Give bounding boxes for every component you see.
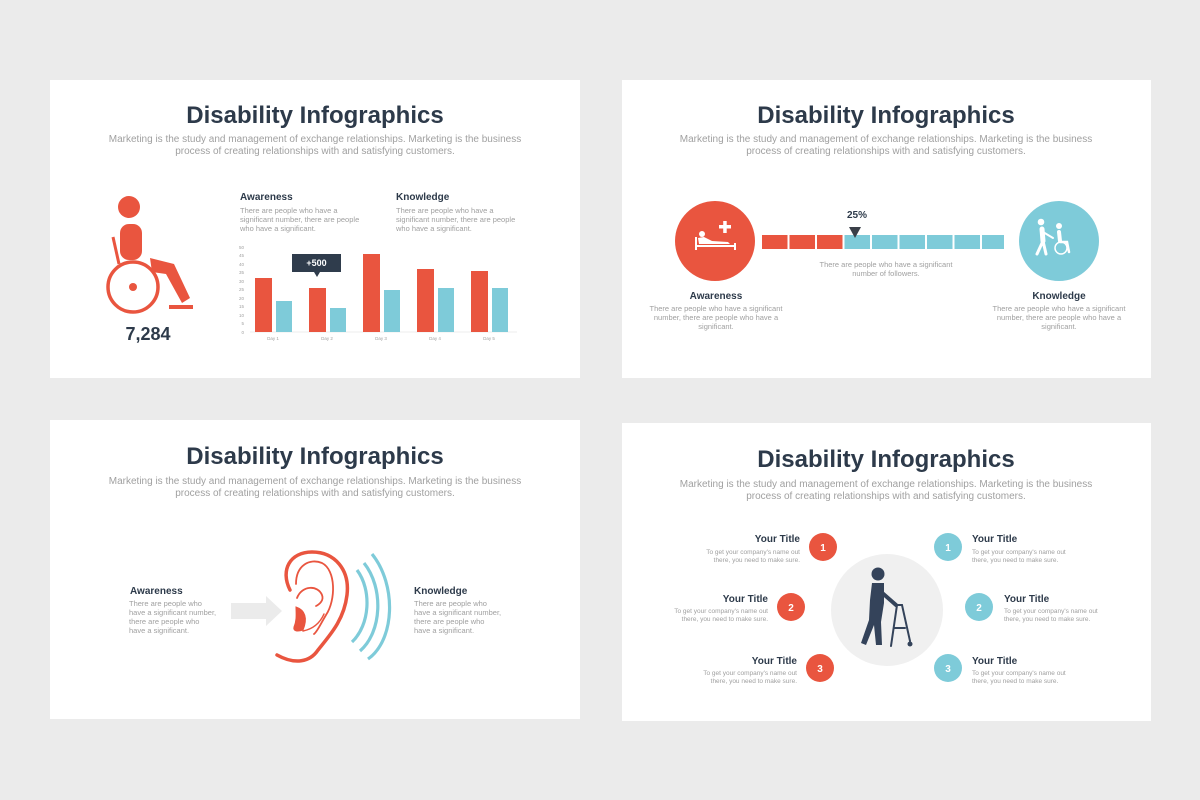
- item: right 2: [965, 593, 1098, 623]
- subtitle: process of creating relationships with and satisfying customers.: [175, 488, 455, 499]
- text: followers: number of followers.: [852, 269, 920, 278]
- item: right 2: 2: [976, 603, 982, 614]
- bar chart: Day 3: [375, 336, 387, 341]
- icon: sound waves: [352, 554, 390, 659]
- text: awareness: have a significant.: [129, 626, 189, 635]
- subtitle: [109, 134, 521, 157]
- bar chart: 25: [239, 287, 244, 292]
- text: knowledge: have a significant number,: [414, 608, 501, 617]
- subtitle: process of creating relationships with and satisfying customers.: [746, 491, 1026, 502]
- text: knowledge: Knowledge: [414, 586, 468, 597]
- text: awareness: significant number, there are people: [240, 215, 359, 224]
- item: left 1: [706, 533, 837, 564]
- bar chart: [239, 245, 517, 341]
- item: right 3: To get your company's name out: [972, 670, 1066, 677]
- text: knowledge: There are people who have a: [396, 206, 494, 215]
- text: knowledge: who have a significant.: [395, 224, 472, 233]
- text: awareness: [239, 192, 359, 233]
- text: knowledge: have a significant.: [414, 626, 474, 635]
- item: right 2: To get your company's name out: [1004, 608, 1098, 615]
- text: awareness: [649, 291, 783, 331]
- bar chart: 15: [239, 304, 244, 309]
- text: followers: [819, 260, 953, 278]
- text: knowledge: [992, 291, 1126, 331]
- number: 7,284: 7,284: [125, 324, 171, 344]
- bar chart: 20: [239, 296, 244, 301]
- item: right 3: Your Title: [972, 656, 1018, 667]
- text: knowledge: [395, 192, 515, 233]
- text: knowledge: [414, 586, 501, 635]
- text: awareness: there are people who: [129, 617, 199, 626]
- text: knowledge: significant.: [1041, 322, 1077, 331]
- subtitle: Marketing is the study and management of exchange relationships. Marketing is the business: [680, 479, 1092, 490]
- item: left 2: [674, 593, 805, 623]
- item: right 3: [934, 654, 1066, 685]
- item: left 1: there, you need to make sure.: [714, 557, 800, 564]
- subtitle: Marketing is the study and management of exchange relationships. Marketing is the business: [109, 134, 521, 145]
- item: right 2: Your Title: [1004, 594, 1050, 605]
- title: Disability Infographics: [757, 102, 1015, 129]
- text: awareness: number, there are people who have a: [654, 313, 779, 322]
- bar chart: Day 1: [267, 336, 279, 341]
- text: knowledge: Knowledge: [1032, 291, 1086, 302]
- subtitle: process of creating relationships with and satisfying customers.: [175, 146, 455, 157]
- item: right 1: 1: [945, 543, 951, 554]
- bar chart: Day 5: [483, 336, 495, 341]
- item: left 2: 2: [788, 603, 794, 614]
- item: left 2: there, you need to make sure.: [682, 616, 768, 623]
- bar chart: 30: [239, 279, 244, 284]
- text: awareness: Awareness: [240, 192, 293, 203]
- text: awareness: There are people who have a significant: [649, 304, 783, 313]
- item: right 2: there, you need to make sure.: [1004, 616, 1091, 623]
- panel: walker with numbered points: [622, 423, 1151, 721]
- item: right 1: there, you need to make sure.: [972, 557, 1059, 564]
- progress bar: [762, 235, 1004, 249]
- item: left 3: 3: [817, 664, 823, 675]
- item: left 1: Your Title: [755, 534, 800, 545]
- callout: +500: +500: [306, 258, 327, 268]
- text: knowledge: There are people who: [414, 599, 487, 608]
- bar chart: 35: [239, 270, 244, 275]
- item: right 1: To get your company's name out: [972, 549, 1066, 556]
- text: awareness: Awareness: [130, 586, 183, 597]
- icon: wheelchair: [108, 196, 193, 312]
- panel: progress awareness to knowledge: [622, 80, 1151, 378]
- bar chart: 40: [239, 262, 244, 267]
- bar chart: 50: [239, 245, 244, 250]
- callout: +500: [292, 254, 341, 277]
- text: knowledge: number, there are people who have a: [997, 313, 1122, 322]
- item: right 3: there, you need to make sure.: [972, 678, 1059, 685]
- text: knowledge: significant number, there are people: [396, 215, 515, 224]
- item: left 3: [703, 654, 834, 685]
- text: awareness: have a significant number,: [129, 608, 216, 617]
- text: knowledge: There are people who have a significant: [992, 304, 1126, 313]
- item: left 3: Your Title: [752, 656, 797, 667]
- bar chart: Day 2: [321, 336, 333, 341]
- text: awareness: There are people who: [129, 599, 202, 608]
- text: followers: There are people who have a significant: [819, 260, 953, 269]
- panel: ear hearing: [50, 420, 580, 719]
- item: left 3: there, you need to make sure.: [711, 678, 797, 685]
- marker: 25%: [847, 210, 867, 238]
- text: awareness: [129, 586, 216, 635]
- item: right 3: 3: [945, 664, 951, 675]
- text: awareness: Awareness: [690, 291, 743, 302]
- bar chart: 0: [241, 330, 244, 335]
- icon: caregiver circle: [1019, 201, 1099, 281]
- subtitle: [109, 476, 521, 499]
- text: knowledge: Knowledge: [396, 192, 450, 203]
- item: left 3: To get your company's name out: [703, 670, 797, 677]
- title: Disability Infographics: [186, 102, 444, 129]
- item: right 1: Your Title: [972, 534, 1018, 545]
- item: left 2: To get your company's name out: [674, 608, 768, 615]
- text: awareness: who have a significant.: [239, 224, 316, 233]
- bar chart: 5: [241, 321, 244, 326]
- bar chart: 45: [239, 253, 244, 258]
- icon: hospital bed circle: [675, 201, 755, 281]
- subtitle: [680, 479, 1092, 502]
- subtitle: process of creating relationships with and satisfying customers.: [746, 146, 1026, 157]
- item: left 1: To get your company's name out: [706, 549, 800, 556]
- panel: wheelchair bar chart: [50, 80, 580, 378]
- bar chart: 10: [239, 313, 244, 318]
- arrow: [231, 596, 282, 626]
- text: knowledge: there are people who: [414, 617, 484, 626]
- item: left 2: Your Title: [723, 594, 768, 605]
- subtitle: [680, 134, 1092, 157]
- title: Disability Infographics: [757, 446, 1015, 473]
- item: left 1: 1: [820, 543, 826, 554]
- item: right 1: [934, 533, 1066, 564]
- text: awareness: significant.: [698, 322, 734, 331]
- icon: ear: [277, 552, 347, 661]
- marker: 25%: 25%: [847, 210, 867, 221]
- icon: person with walker: [831, 554, 943, 666]
- text: awareness: There are people who have a: [240, 206, 338, 215]
- subtitle: Marketing is the study and management of exchange relationships. Marketing is the business: [680, 134, 1092, 145]
- bar chart: Day 4: [429, 336, 441, 341]
- subtitle: Marketing is the study and management of exchange relationships. Marketing is the business: [109, 476, 521, 487]
- title: Disability Infographics: [186, 443, 444, 470]
